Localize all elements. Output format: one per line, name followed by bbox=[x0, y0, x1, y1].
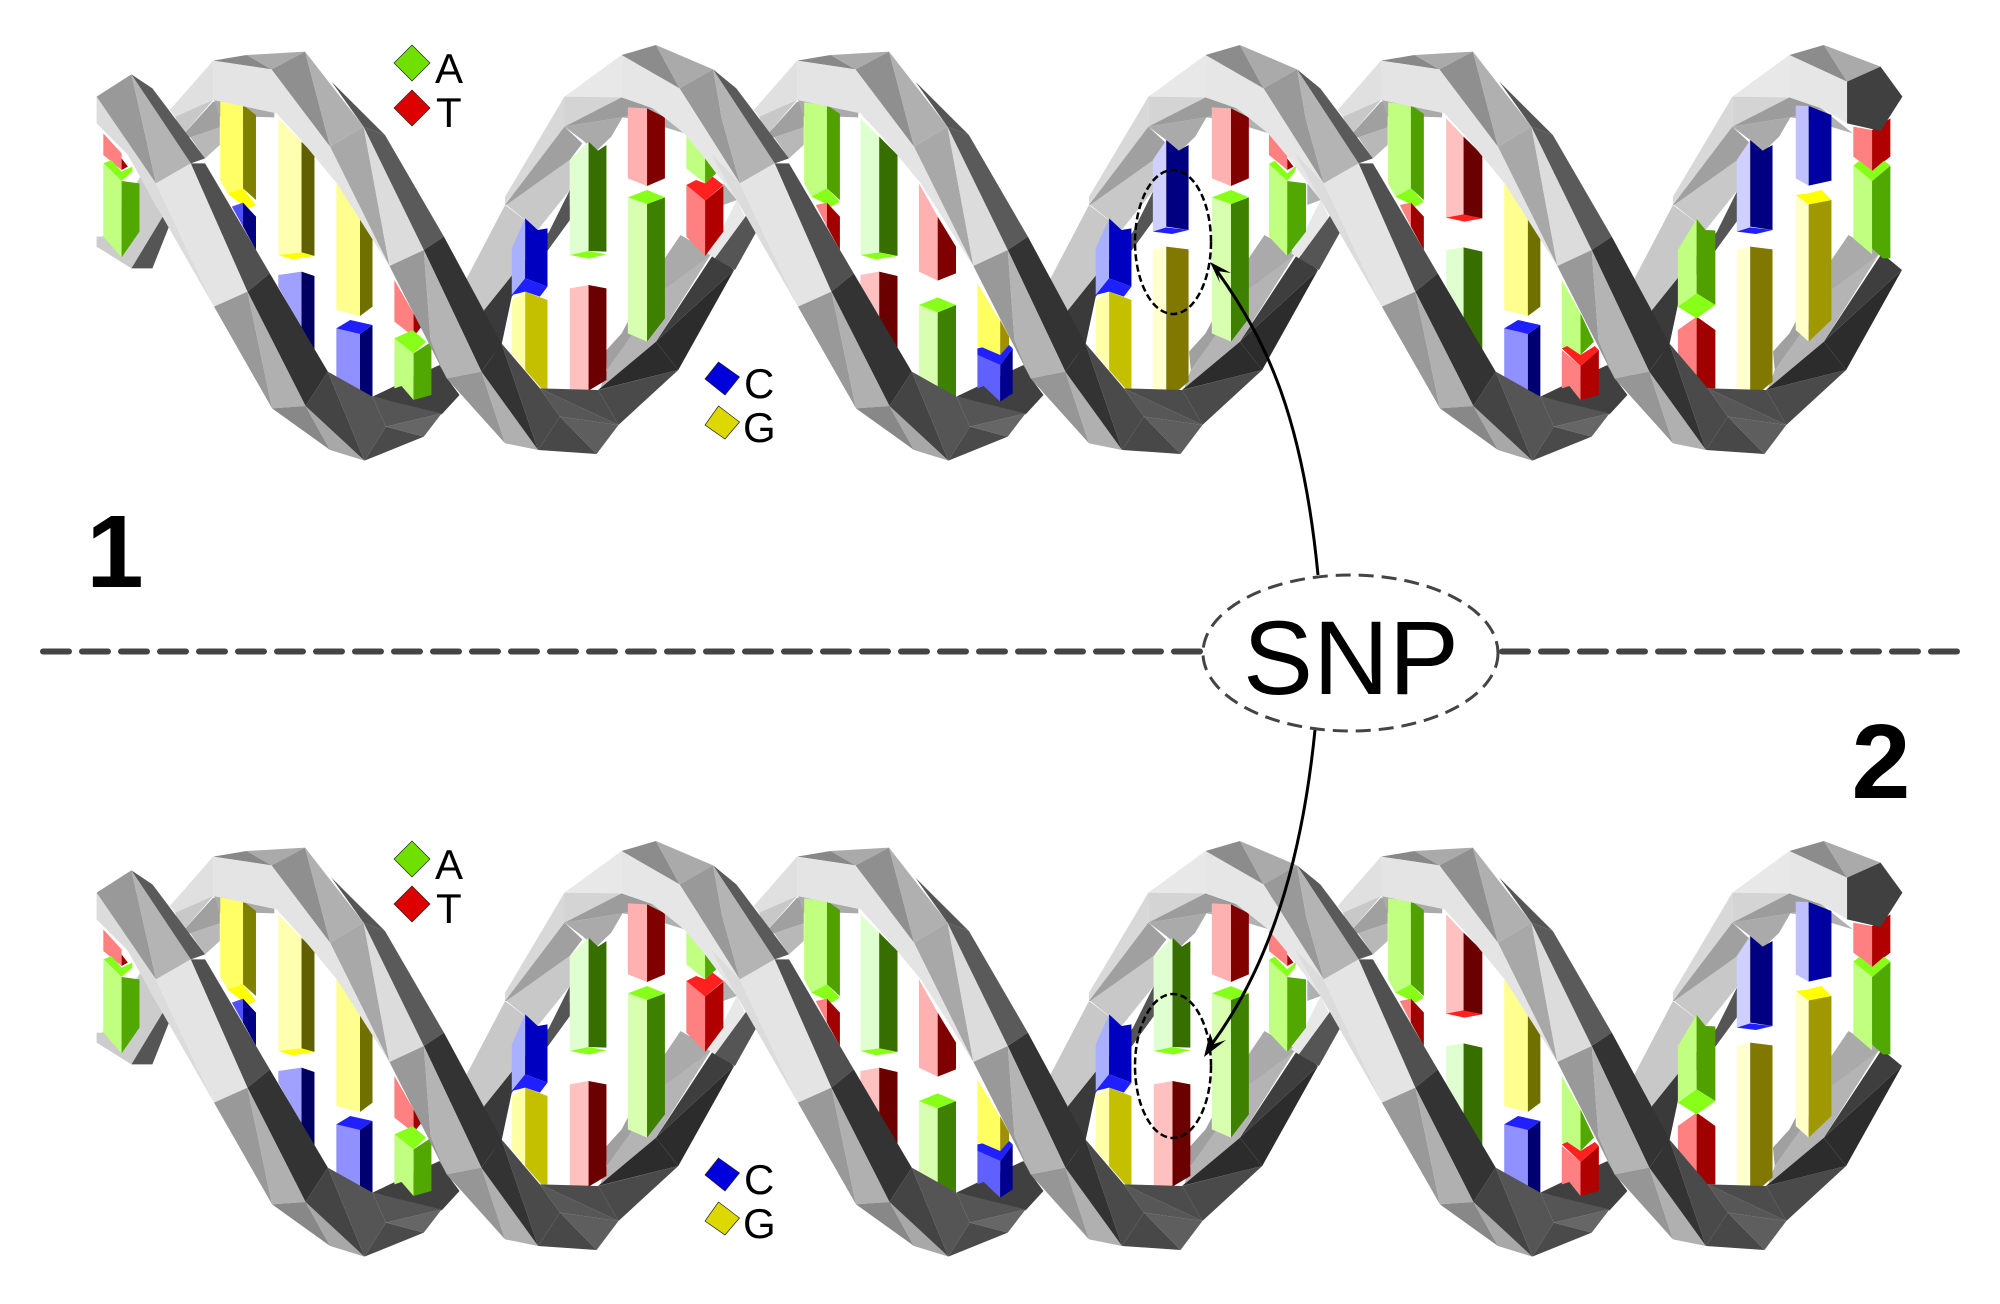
arrow to helix 2 SNP bbox=[1204, 730, 1315, 1057]
legend helix 1: C and G: C bbox=[744, 360, 774, 407]
legend helix 2: A and T bbox=[394, 841, 463, 932]
SNP marker ellipse on helix 2 bbox=[1135, 994, 1211, 1138]
helix 1 base pairs, third turn bbox=[1388, 102, 1890, 405]
helix 1 SNP base pair C-G bbox=[1153, 140, 1189, 390]
divider left bbox=[43, 648, 1200, 654]
divider right bbox=[1502, 648, 1965, 654]
legend helix 1: C and G bbox=[705, 360, 776, 451]
legend helix 2: A and T: T bbox=[436, 885, 462, 932]
helix 2 base pairs, second turn bbox=[804, 898, 1306, 1204]
legend helix 1: C and G: G bbox=[743, 404, 776, 451]
helix 2 front strands bbox=[97, 841, 1902, 1257]
legend helix 2: C and G: G bbox=[743, 1200, 776, 1247]
helix 1 back strands bbox=[97, 55, 1902, 414]
DNA helix 1 bbox=[97, 45, 1902, 461]
SNP callout bbox=[1203, 575, 1498, 731]
number 2: 2 bbox=[1852, 703, 1910, 821]
helix 1 front strands bbox=[97, 45, 1902, 461]
SNP marker ellipse on helix 1 bbox=[1135, 170, 1211, 314]
helix 2 back strands bbox=[97, 851, 1902, 1210]
number 1: 1 bbox=[86, 494, 144, 609]
helix 1 base pairs, second turn bbox=[804, 102, 1306, 408]
SNP callout: SNP bbox=[1243, 600, 1459, 717]
helix 2 base pairs, third turn bbox=[1388, 898, 1890, 1201]
helix 2 base pairs, first turn bbox=[103, 898, 723, 1201]
arrow to helix 1 SNP bbox=[1210, 262, 1318, 575]
legend helix 2: A and T: A bbox=[435, 841, 463, 888]
legend helix 2: C and G bbox=[705, 1156, 776, 1247]
DNA helix 2 bbox=[97, 841, 1902, 1257]
legend helix 1: A and T: A bbox=[435, 45, 463, 92]
helix 2 SNP base pair A-T bbox=[1154, 938, 1190, 1187]
legend helix 1: A and T: T bbox=[436, 89, 462, 136]
helix 1 base pairs, first turn bbox=[103, 102, 723, 405]
legend helix 2: C and G: C bbox=[744, 1156, 774, 1203]
legend helix 1: A and T bbox=[394, 45, 463, 136]
